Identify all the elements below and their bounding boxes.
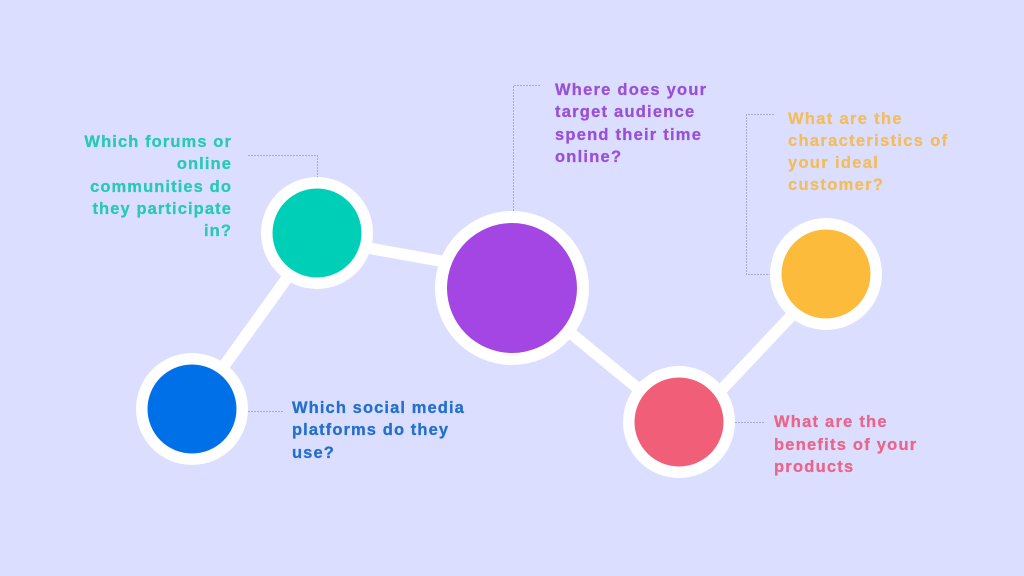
label: benefits xyxy=(774,413,917,476)
label: ideal customer xyxy=(788,110,948,194)
label: forums: communities do xyxy=(90,178,232,196)
label: forums xyxy=(84,133,232,240)
node: blue xyxy=(136,353,248,465)
label: social media: Which social media xyxy=(292,399,465,417)
node: purple xyxy=(435,211,589,365)
label: social media: use? xyxy=(292,444,335,462)
node: red xyxy=(623,366,735,478)
label: ideal customer: What are the xyxy=(788,110,903,128)
label: target audience xyxy=(554,81,707,166)
label: forums: they participate xyxy=(92,200,232,218)
label: social media xyxy=(292,399,465,462)
label: forums: in? xyxy=(204,222,232,240)
node: yellow xyxy=(770,218,882,330)
label: ideal customer: customer? xyxy=(788,176,884,194)
label: benefits: products xyxy=(774,458,854,476)
label: social media: platforms do they xyxy=(292,421,449,439)
leader lines xyxy=(248,86,774,422)
node: teal xyxy=(261,177,373,289)
label: forums: Which forums or xyxy=(84,133,232,151)
label: target audience: spend their time xyxy=(555,126,702,144)
label: forums: online xyxy=(177,155,232,173)
label: benefits: benefits of your xyxy=(774,436,917,454)
label: target audience: online? xyxy=(555,148,622,166)
label: ideal customer: characteristics of xyxy=(788,132,948,150)
label: ideal customer: your ideal xyxy=(788,154,879,172)
label: target audience: target audience xyxy=(555,103,695,121)
label: benefits: What are the xyxy=(774,413,888,431)
connecting lines xyxy=(212,245,805,402)
label: target audience: Where does your xyxy=(555,81,707,99)
